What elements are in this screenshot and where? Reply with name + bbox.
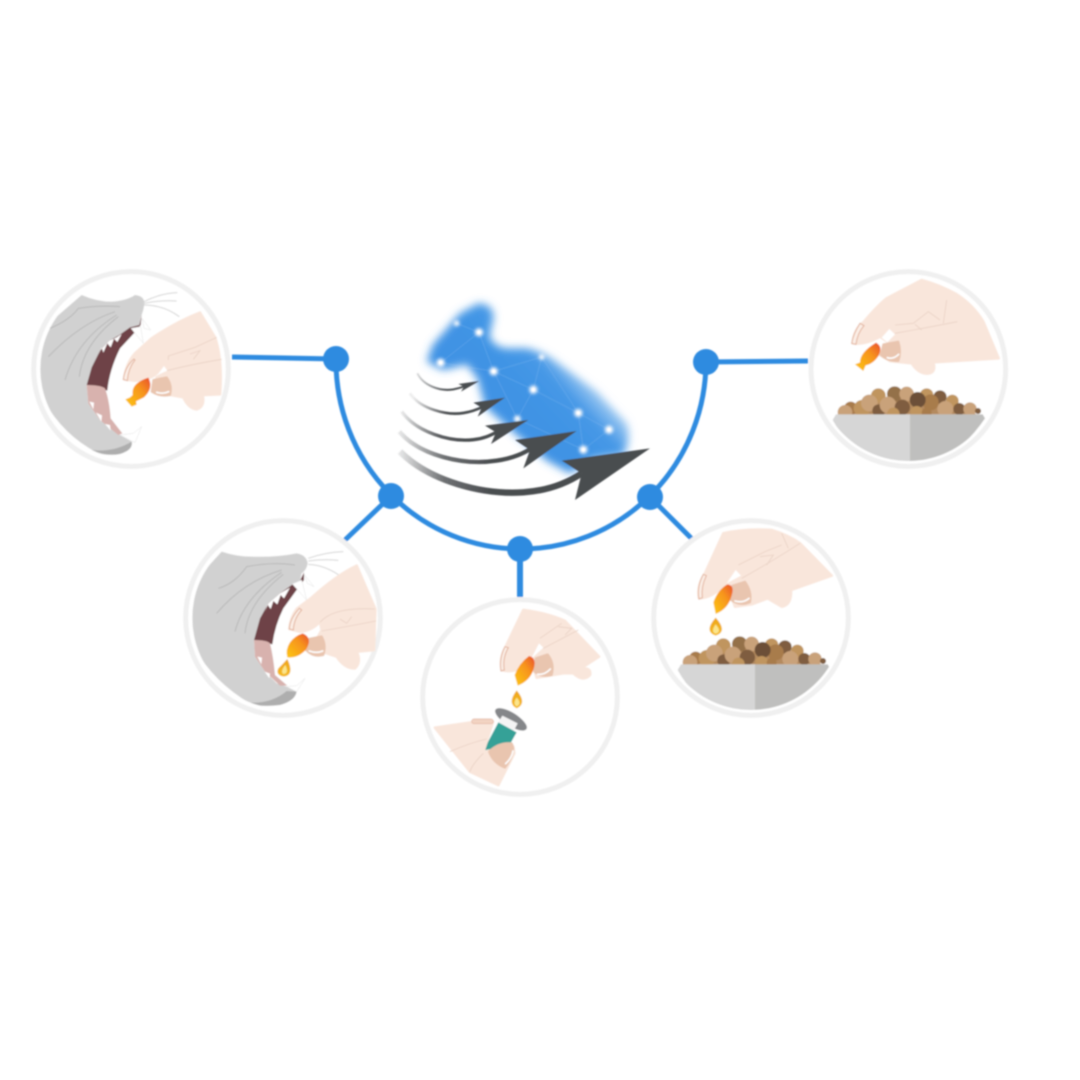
circle frame [186,521,380,715]
connector line to circle 5 [706,361,808,362]
arrow 5 [400,448,650,500]
gap between fingers [882,329,895,342]
connector line to circle 3 [517,549,523,597]
syringe body [481,722,517,755]
hand creases [167,337,222,371]
hand [698,530,832,607]
syringe white tip [498,716,518,731]
arrow 1 [417,373,479,392]
hand [853,280,999,374]
thumb nail [306,636,325,656]
illustration [34,272,1006,794]
index fingernail [852,323,864,344]
kibble pile [683,636,826,670]
whiskers [308,552,343,578]
connector line to circle 4 [650,497,692,539]
lower fingernail [472,719,493,724]
tongue [254,640,287,686]
whiskers [144,293,179,317]
hand crease [450,739,487,772]
node 4 [637,484,663,510]
syringe flange [492,704,530,735]
arrow 2 [410,393,505,417]
cat chin shadow [92,442,132,455]
connector network [232,346,808,597]
blue animal silhouette [427,303,629,473]
cat face lines [217,564,295,633]
index fingernail [123,359,135,381]
connector line to circle 1 [232,357,336,359]
gap between fingers [157,366,167,375]
hand creases [540,623,578,648]
capsule [287,633,309,658]
index fingernail [289,608,302,630]
index fingernail [500,647,508,671]
index fingernail [698,574,706,599]
panel: capsule squeezed over food [654,521,848,715]
circle frame [423,600,617,794]
cat head [39,295,144,455]
gap between fingers [531,643,543,659]
circle frame [34,272,228,466]
arrow 3 [402,412,528,444]
glowing nodes [437,321,613,454]
thumb nail [152,377,171,396]
arrow 4 [399,431,577,468]
kibble pile [838,386,981,420]
teeth [120,318,151,443]
circle frame [811,272,1006,466]
connector arc [336,360,706,549]
panel: capsule given whole by mouth [34,272,228,466]
oil drop [512,690,522,708]
central icon: body with absorption arrows [399,303,650,500]
hand creases [895,300,957,333]
food bowl [833,414,985,465]
small teeth [89,334,122,431]
cat head [192,552,308,706]
hand [501,610,599,678]
thumb nail [731,582,751,604]
mouth roof [254,572,304,644]
hand creases [738,533,800,578]
node 3 [507,536,533,562]
lower hand [435,722,514,785]
capsule [713,584,733,614]
oil drop [277,659,290,677]
panel: capsule squeezed into mouth [186,521,380,715]
hand creases [320,609,376,631]
panel: capsule squeezed into syringe [423,600,617,794]
oil drop [709,618,722,636]
gap between fingers [727,570,741,583]
hand [289,566,375,668]
panel: capsule given with food [811,272,1006,466]
thumb nail [534,654,553,676]
circle frame [654,521,848,715]
cat face lines [48,306,120,380]
capsule [515,656,535,686]
capsule [855,343,880,371]
mouth roof [87,315,142,391]
thumb nail [881,342,900,361]
node 1 [323,346,349,372]
connector line to circle 2 [345,496,391,540]
tongue [87,385,122,435]
network lines [441,323,609,450]
node 2 [378,483,404,509]
food bowl [678,664,830,715]
infographic [32,269,1008,797]
lower thumb nail [489,743,513,768]
small teeth [257,588,290,678]
cat chin shadow [245,691,297,706]
hand [124,313,221,409]
capsule [125,378,150,407]
teeth [287,574,314,692]
node 5 [693,349,719,375]
